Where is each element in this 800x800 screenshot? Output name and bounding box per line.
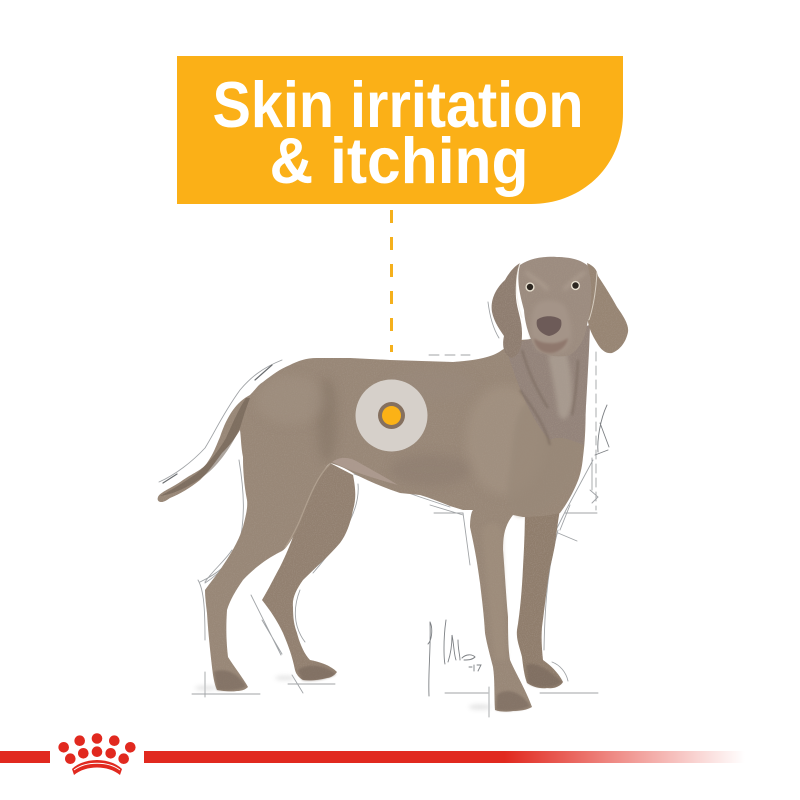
- near foreleg highlight: [482, 523, 507, 660]
- belly highlight: [332, 458, 398, 485]
- target marker on dog: [356, 380, 428, 452]
- head brow shading: [526, 272, 585, 290]
- neck: [505, 325, 590, 445]
- left ear: [492, 263, 522, 358]
- title banner: [177, 56, 623, 204]
- red bar left: [0, 751, 50, 763]
- near hind leg and torso: [158, 335, 588, 712]
- title text line 1: Skin irritation: [212, 68, 584, 141]
- paws: [214, 664, 562, 711]
- muzzle: [531, 300, 571, 353]
- far hind leg: [262, 463, 355, 680]
- icon: royal crown logo: [58, 733, 136, 775]
- dashed connector line: [390, 210, 393, 352]
- neck folds: [548, 352, 572, 419]
- left eye: [525, 282, 535, 292]
- body shading: [317, 383, 522, 485]
- dog photo illustration: [158, 257, 628, 712]
- nose: [537, 316, 561, 336]
- right ear: [587, 263, 628, 353]
- title text line 2: & itching: [270, 124, 528, 197]
- pencil sketch lines around dog: [159, 302, 609, 717]
- soft paw shadows: [195, 676, 491, 710]
- right eye: [571, 281, 580, 290]
- ear edge highlights: [516, 263, 597, 320]
- far front leg: [517, 505, 563, 688]
- tail shading: [160, 398, 250, 496]
- chest: [508, 398, 580, 516]
- artist signature: [428, 620, 481, 696]
- red bar right with fade: [144, 751, 745, 763]
- head: [518, 257, 591, 356]
- thigh edge highlight: [285, 464, 330, 548]
- mouth: [534, 338, 568, 353]
